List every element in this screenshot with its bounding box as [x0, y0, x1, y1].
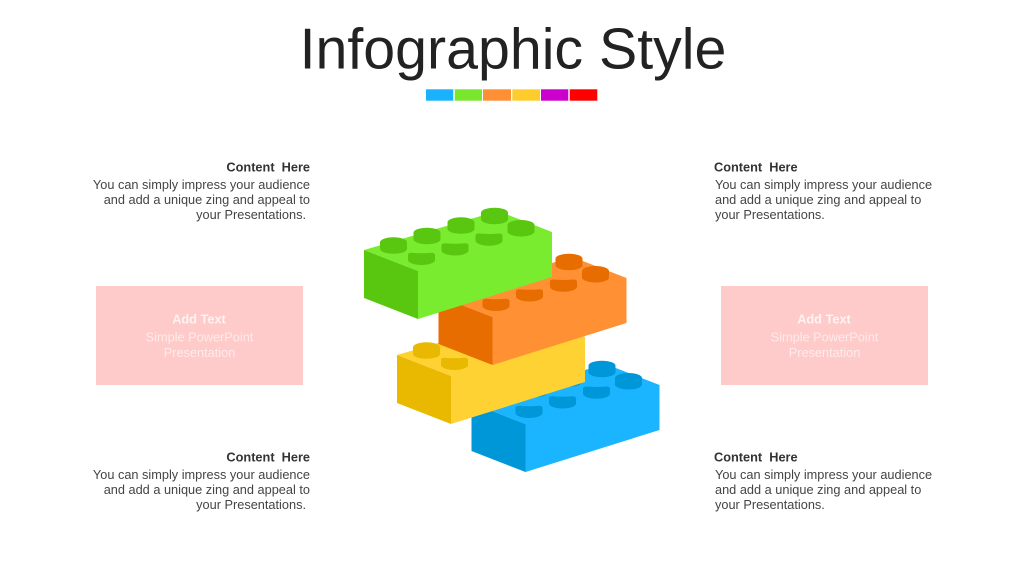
panel: right add text: Add Text: [797, 312, 852, 326]
brick: blue: [472, 361, 660, 472]
text block: bottom left: your Presentations.: [196, 497, 306, 512]
text block: bottom right: your Presentations.: [715, 497, 825, 512]
text block: top right: and add a unique zing and appeal to: [715, 192, 921, 207]
text block: top left: [93, 159, 310, 222]
text block: top right: your Presentations.: [715, 207, 825, 222]
text block: top right: [714, 159, 932, 222]
panel: right add text: Simple PowerPoint: [771, 330, 879, 344]
text block: bottom right: and add a unique zing and appeal to: [715, 482, 921, 497]
text block: bottom left: Content Here: [226, 449, 310, 464]
colour bar: [426, 89, 597, 101]
text block: top left: You can simply impress your audience: [93, 177, 310, 192]
panel: left add text: [96, 286, 303, 385]
text block: bottom right: You can simply impress your audience: [715, 467, 932, 482]
panel: left add text: Add Text: [172, 312, 227, 326]
text block: top left: your Presentations.: [196, 207, 306, 222]
text block: top right: You can simply impress your audience: [715, 177, 932, 192]
panel: left add text: Presentation: [164, 345, 235, 360]
text block: top left: Content Here: [226, 159, 310, 174]
text block: bottom right: Content Here: [714, 449, 798, 464]
panel: right add text: [721, 286, 928, 385]
text block: bottom right: [714, 449, 932, 512]
text block: top left: and add a unique zing and appeal to: [104, 192, 310, 207]
text block: bottom left: [93, 449, 310, 512]
brick: orange: [438, 254, 626, 365]
text block: top right: Content Here: [714, 159, 798, 174]
brick: yellow: [397, 313, 585, 424]
text block: bottom left: and add a unique zing and appeal to: [104, 482, 310, 497]
brick: green: [364, 208, 552, 319]
title: Infographic Style: [300, 18, 726, 82]
panel: left add text: Simple PowerPoint: [146, 330, 254, 344]
panel: right add text: Presentation: [789, 345, 860, 360]
text block: bottom left: You can simply impress your audience: [93, 467, 310, 482]
